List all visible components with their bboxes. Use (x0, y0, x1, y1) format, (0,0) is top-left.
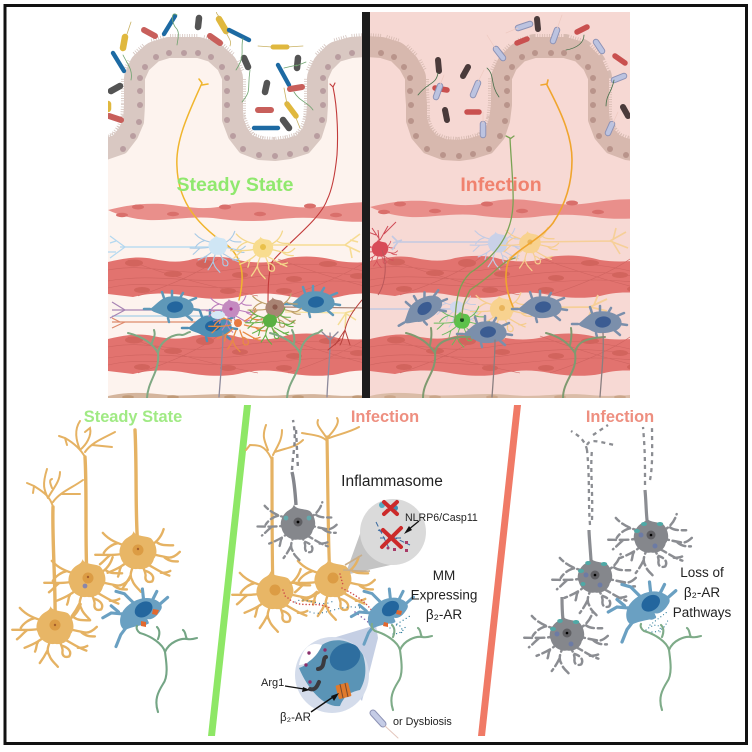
panel: steady state gut (108, 12, 362, 398)
label: loss of pathways: Loss of (680, 565, 724, 580)
label: MM expressing: MM (433, 568, 455, 583)
grey neuron (258, 420, 338, 562)
label: Arg1: Arg1 (261, 677, 284, 689)
neuron: infection yellow 1 (501, 228, 628, 271)
macrophage: infection 2 (512, 291, 567, 322)
callout cone: macrophage (313, 625, 378, 701)
heading: lower infection centre: Infection (351, 408, 419, 426)
macrophage: steady 3 (285, 286, 340, 317)
label: NLRP6/Casp11: NLRP6/Casp11 (405, 512, 478, 524)
bacterium: dysbiosis (373, 713, 398, 738)
neuron: infection red (370, 222, 398, 296)
neuron: steady blue (108, 231, 245, 272)
macrophage: steady 2 (182, 310, 237, 341)
heading: infection: Infection (460, 174, 542, 196)
macrophage magnified (295, 637, 369, 713)
inflammasome inset (360, 499, 426, 565)
neuron cluster: steady (206, 294, 301, 352)
nerves: infection (455, 80, 572, 322)
bacteria: commensals (108, 9, 313, 128)
panel: infection centre (232, 418, 478, 738)
heading: steady state: Steady State (176, 174, 294, 196)
macrophage: steady 1 (144, 291, 199, 322)
macrophage: infection 3 (572, 306, 627, 337)
divider bar (362, 12, 370, 398)
divider: red (478, 405, 521, 736)
neuron: infection blue 2 (370, 296, 479, 329)
label: MM expressing: Expressing (411, 588, 477, 602)
heading: lower infection right: Infection (586, 408, 654, 426)
neuron: infection green (434, 306, 489, 347)
neuron: infection blue (392, 228, 525, 269)
panel: steady neurons (12, 421, 197, 712)
axons (110, 302, 366, 328)
nerve (137, 626, 197, 712)
arrow: NLRP6 (404, 521, 419, 534)
macrophage (351, 589, 413, 644)
nerve (372, 624, 432, 710)
inflammatory particles (283, 574, 375, 625)
sensory nerves: steady (128, 300, 362, 398)
bacteria: dysbiotic (418, 15, 628, 135)
label: or Dysbiosis: or Dysbiosis (393, 716, 452, 728)
neuron: steady yellow (231, 231, 360, 279)
label: Inflammasome: Inflammasome (341, 473, 443, 490)
label: loss of pathways: Pathways (673, 605, 732, 620)
label: MM expressing: β₂-AR (426, 607, 462, 622)
panel: infection right (524, 425, 732, 710)
neuron: infection yellow 2 (470, 293, 607, 339)
callout cone: inflammasome (345, 509, 395, 575)
label: loss of pathways: β₂-AR (684, 585, 720, 600)
macrophage: infection 4 (457, 316, 512, 347)
macrophage: infection 1 (398, 288, 448, 327)
heading: lower steady state: Steady State (84, 408, 182, 426)
divider: green (208, 405, 251, 736)
nerve (641, 624, 701, 710)
nerves: sympathetic and sensory fibres (177, 79, 338, 305)
macrophage (608, 582, 676, 642)
grey neurons (524, 425, 693, 675)
secreted dots (646, 612, 668, 632)
panel: infection gut (370, 12, 630, 398)
label: beta2-AR: β₂-AR (280, 712, 311, 724)
arrow: Arg1 (285, 686, 310, 692)
sensory nerves: infection (406, 328, 605, 398)
arrow: beta2-AR (311, 693, 339, 712)
macrophage (103, 589, 168, 647)
